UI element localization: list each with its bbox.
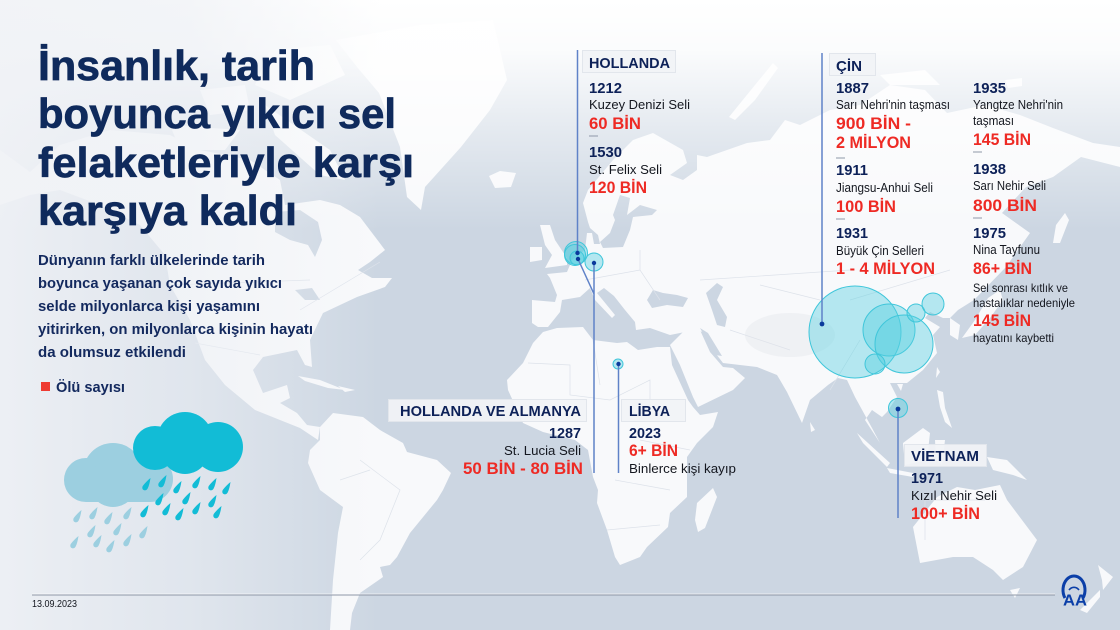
map: Southeast Asia islands (810, 367, 952, 477)
front cloud with rain (133, 412, 243, 520)
panel: Netherlands: 120 BİN (589, 178, 647, 197)
panel: Vietnam (904, 444, 997, 523)
panel: China: Sarı Nehir Seli (973, 178, 1046, 193)
map: Himalaya shading (745, 313, 835, 357)
map: country borders (170, 250, 985, 560)
panel: China: 800 BİN (973, 196, 1037, 215)
panel: Netherlands (582, 50, 690, 197)
panel: China: 1 - 4 MİLYON (836, 259, 935, 278)
panel: China: Sel sonrası kıtlık ve (973, 281, 1068, 295)
map: Arabian Peninsula (670, 327, 745, 407)
panel: Vietnam: Kızıl Nehir Seli (911, 488, 997, 503)
Germany flood circle (585, 253, 603, 271)
panel: China: 145 BİN (973, 130, 1031, 149)
panel: Netherlands and Germany: 50 BİN - 80 BİN (463, 459, 583, 478)
panel: China: taşması (973, 113, 1014, 128)
map: Novaya Zemlya and Arctic islands (729, 63, 1022, 120)
panel: China: ÇİN (836, 58, 862, 75)
icon: AA logo: AA (1063, 592, 1087, 610)
description text: yitirirken, on milyonlarca kişinin hayatı (38, 321, 313, 338)
footer line (32, 594, 1055, 595)
panel: China: 1935 (973, 80, 1006, 97)
panel: Netherlands: 1530 (589, 144, 622, 161)
title: felaketleriyle karşı (38, 139, 414, 186)
panel: China: 1938 (973, 161, 1006, 178)
panel: China: 1931 (836, 225, 868, 242)
date: 13.09.2023 (32, 599, 77, 610)
title (38, 42, 414, 234)
icon: rain clouds (64, 412, 243, 552)
map: Japan, Korea, Sakhalin (950, 213, 1069, 340)
description text: Dünyanın farklı ülkelerinde tarih (38, 252, 265, 269)
icon: AA logo (1063, 576, 1087, 610)
panel: Netherlands: Kuzey Denizi Seli (589, 97, 690, 112)
panel: Vietnam: 1971 (911, 470, 943, 487)
panel: China: 900 BİN - (836, 114, 911, 133)
panel: China (830, 54, 1075, 345)
panel: China: hastalıklar nedeniyle (973, 296, 1075, 310)
panel: China: 1975 (973, 225, 1006, 242)
map: Greenland (336, 20, 507, 210)
panel: Vietnam: 100+ BİN (911, 504, 980, 523)
panel: Netherlands: St. Felix Seli (589, 162, 662, 177)
panel: Libya (622, 400, 736, 476)
legend: death toll: Ölü sayısı (56, 379, 125, 396)
leader: Vietnam (896, 407, 900, 518)
panel: China: 1911 (836, 162, 868, 179)
China flood circles (809, 286, 944, 378)
title: boyunca yıkıcı sel (38, 90, 396, 137)
map: inland and surrounding seas (275, 195, 727, 356)
panel: China: 2 MİLYON (836, 133, 911, 152)
panel: Vietnam: VİETNAM (911, 448, 979, 465)
panel: China: hayatını kaybetti (973, 331, 1054, 345)
title: İnsanlık, tarih (38, 42, 315, 89)
panel: China: 1887 (836, 80, 869, 97)
description text: da olumsuz etkilendi (38, 344, 186, 361)
map: Madagascar (695, 488, 717, 532)
panel: Libya: LİBYA (629, 403, 670, 420)
panel: China: Nina Tayfunu (973, 242, 1040, 257)
Vietnam flood circle (888, 398, 908, 418)
panel: Netherlands and Germany: HOLLANDA VE ALMANYA (400, 403, 581, 420)
panel: Libya: Binlerce kişi kayıp (629, 461, 736, 476)
title: karşıya kaldı (38, 187, 297, 234)
panel: Netherlands and Germany (388, 400, 586, 478)
panel: Libya: 6+ BİN (629, 441, 678, 460)
map: Australia (913, 485, 1037, 580)
map: Africa (507, 327, 718, 565)
panel: Netherlands and Germany: St. Lucia Seli (504, 443, 581, 458)
map: New Zealand (1080, 565, 1113, 613)
leader: China (820, 53, 824, 326)
map: Britain and Ireland (530, 225, 567, 268)
map: Arctic Canada islands (170, 45, 345, 180)
panel: China: Yangtze Nehri'nin (973, 97, 1063, 112)
map: South America (308, 413, 451, 630)
panel: China: Büyük Çin Selleri (836, 243, 924, 258)
panel: Netherlands: 60 BİN (589, 114, 641, 133)
back cloud with rain (64, 443, 173, 552)
description text (38, 252, 313, 361)
map: Eurasia (532, 85, 1120, 443)
panel: Netherlands and Germany: 1287 (549, 425, 581, 442)
leader: Netherlands (575, 50, 580, 255)
map: Iceland (489, 171, 516, 188)
panel: Libya: 2023 (629, 425, 661, 442)
Netherlands flood circles (564, 242, 588, 266)
panel: Netherlands: HOLLANDA (589, 55, 670, 72)
leader: Netherlands and Germany (576, 257, 596, 473)
panel: China: Jiangsu-Anhui Seli (836, 180, 933, 195)
map: Tasmania (1010, 588, 1020, 598)
panel: China: 145 BİN (973, 311, 1031, 330)
description text: boyunca yaşanan çok sayıda yıkıcı (38, 275, 282, 292)
leader: Libya (616, 362, 621, 473)
Libya flood circle (613, 359, 623, 369)
panel: China: 86+ BİN (973, 259, 1032, 278)
panel: Netherlands: 1212 (589, 80, 622, 97)
map: Caribbean islands (298, 376, 355, 392)
panel: China: 100 BİN (836, 197, 896, 216)
flood circles and leader lines (564, 50, 944, 518)
description text: selde milyonlarca kişi yaşamını (38, 298, 260, 315)
panel: China: Sarı Nehri'nin taşması (836, 97, 950, 112)
map: New Guinea (987, 457, 1027, 480)
map: North America (0, 130, 392, 440)
